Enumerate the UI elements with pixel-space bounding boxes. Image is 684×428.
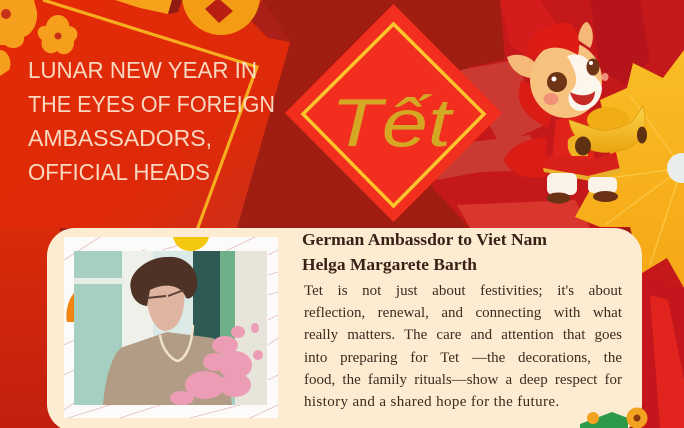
diamond Tet sign bbox=[285, 4, 502, 222]
quote text: history and a shared hope for the future. bbox=[304, 394, 560, 410]
heading: German Ambassdor to Viet Nam bbox=[302, 230, 547, 249]
quote text bbox=[304, 283, 622, 410]
blossoms bbox=[170, 323, 263, 405]
coat bbox=[552, 112, 595, 162]
hands bbox=[568, 136, 588, 156]
photo frame bbox=[64, 237, 278, 418]
blaze bbox=[567, 55, 602, 111]
quote text: Tet is not just about festivities; it's about bbox=[304, 283, 622, 299]
mouth bbox=[570, 91, 595, 105]
gold paper fan bbox=[575, 50, 684, 288]
wall bbox=[235, 251, 267, 405]
horse mascot bbox=[504, 22, 647, 204]
flowers bbox=[0, 0, 77, 76]
mane top bbox=[527, 23, 579, 57]
quote text: reflection, renewal, and connecting with what bbox=[304, 305, 622, 321]
gift box bbox=[580, 408, 648, 428]
head bbox=[530, 42, 602, 118]
tape bbox=[173, 237, 209, 251]
coins bbox=[115, 0, 260, 35]
face and neck bbox=[146, 276, 184, 331]
red envelope bbox=[0, 0, 290, 230]
gold ingot bbox=[587, 107, 629, 133]
heading bbox=[302, 230, 547, 274]
cheek bbox=[544, 93, 558, 105]
necklace bbox=[160, 325, 193, 361]
heading: Helga Margarete Barth bbox=[302, 255, 477, 274]
title: AMBASSADORS, bbox=[28, 125, 212, 151]
glasses bbox=[147, 290, 184, 298]
woman body bbox=[103, 332, 232, 405]
pearl bbox=[667, 153, 684, 183]
tail bbox=[504, 138, 547, 178]
ears bbox=[507, 55, 536, 78]
eyes bbox=[547, 72, 567, 92]
garden bbox=[153, 251, 193, 361]
photo bbox=[74, 251, 267, 405]
title: THE EYES OF FOREIGN bbox=[28, 91, 275, 117]
quote text: really matters. The care and attention that goes bbox=[304, 327, 622, 343]
quote text: food, the family rituals—show a deep respect for bbox=[304, 372, 622, 388]
legs bbox=[547, 173, 577, 195]
title bbox=[28, 57, 275, 185]
panel: profile card bbox=[47, 228, 642, 428]
envelope gold trim bbox=[43, 0, 257, 230]
mane back bbox=[519, 80, 556, 128]
quote text: into preparing for Tet —the decorations, the bbox=[304, 350, 622, 366]
hair bbox=[130, 257, 197, 306]
title: LUNAR NEW YEAR IN bbox=[28, 57, 257, 83]
Tet lettering: Tết bbox=[331, 85, 455, 161]
window frame bbox=[122, 251, 153, 405]
title: OFFICIAL HEADS bbox=[28, 159, 210, 185]
